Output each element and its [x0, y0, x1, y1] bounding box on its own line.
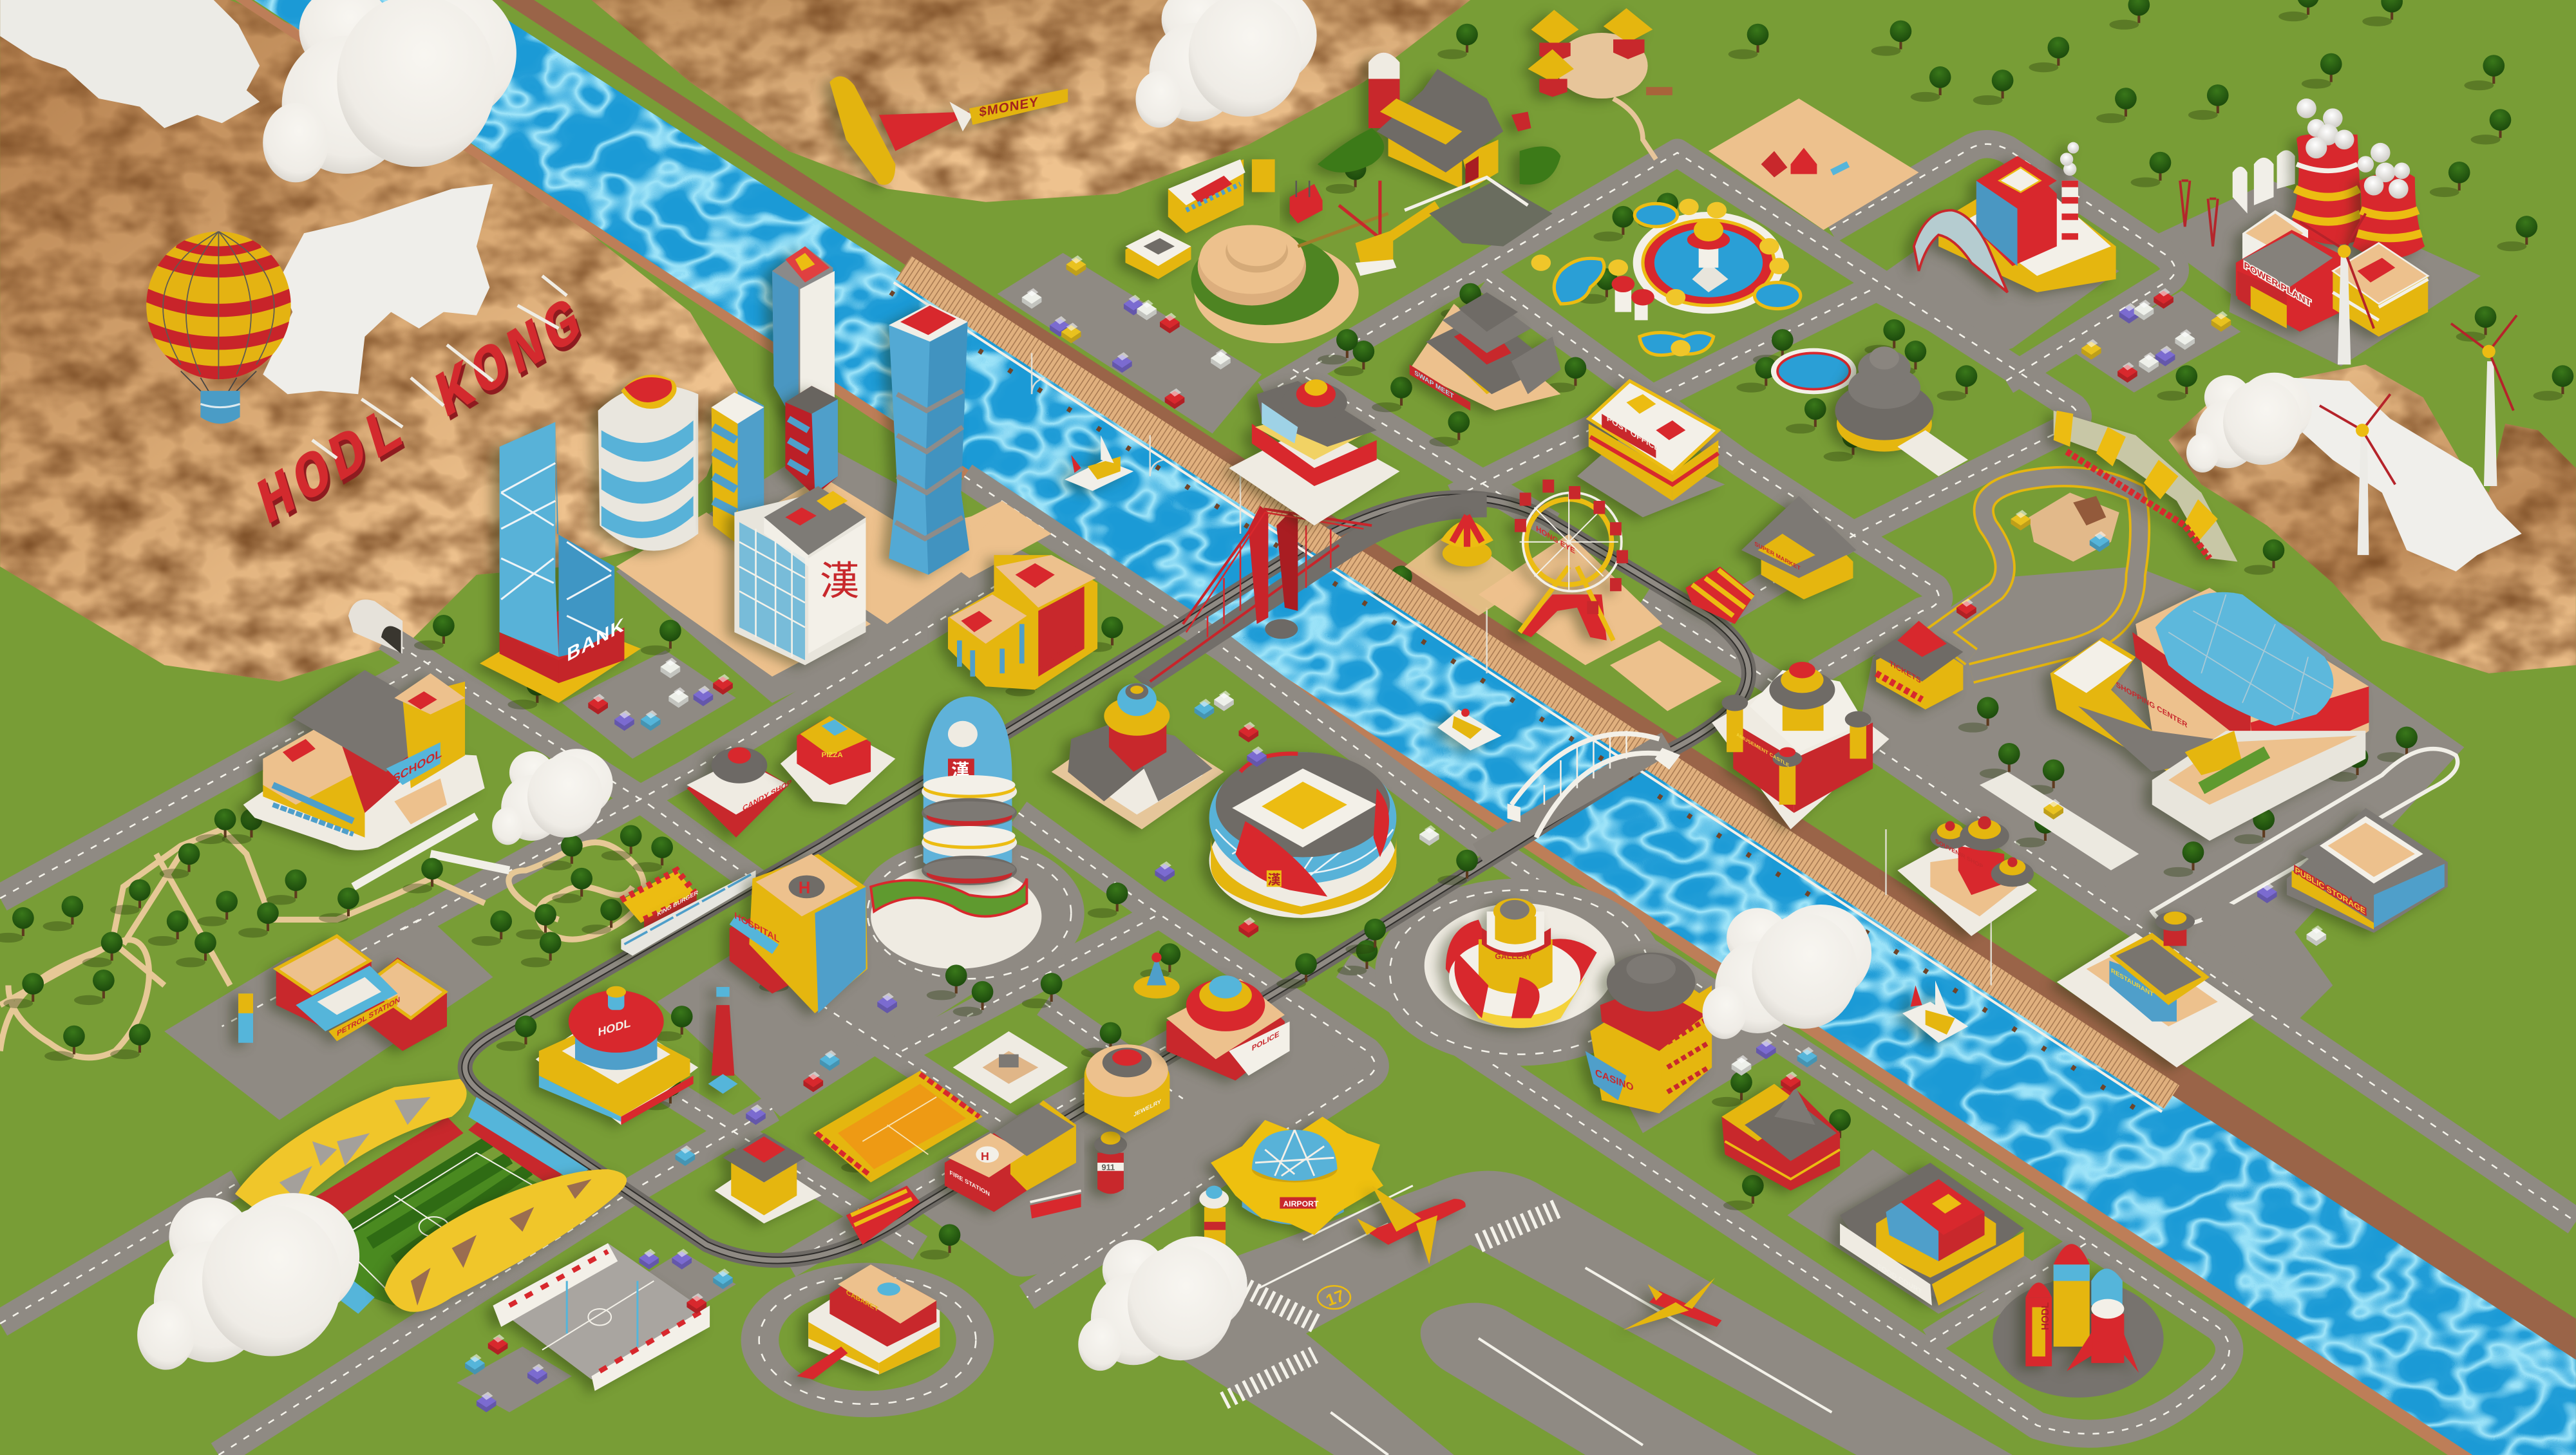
- boat 1: [1065, 435, 1133, 491]
- boat 3: [1902, 981, 1968, 1043]
- cabaret: [797, 1264, 940, 1380]
- police label: POLICE: [1252, 1029, 1280, 1053]
- airport label: AIRPORT: [1283, 1199, 1319, 1208]
- pitch: [328, 1141, 570, 1306]
- race track: [1938, 411, 2237, 673]
- plot: small square: [1610, 641, 1721, 711]
- souvenir label: SOUVENIR SHOP: [1935, 838, 1984, 871]
- wind turbines: [2300, 214, 2517, 555]
- round mound: [1191, 225, 1359, 343]
- mall: [1840, 1163, 2024, 1306]
- petrol station label: PETROL STATION: [337, 995, 400, 1038]
- candy shop: [687, 747, 791, 838]
- mountain: top centre: [591, 0, 1470, 202]
- boardwalk railing: [894, 283, 2162, 1112]
- cloud 5: [1703, 905, 1871, 1039]
- plant hall: [2236, 211, 2428, 337]
- tall blue tower: [889, 304, 969, 575]
- pizza shop: [781, 716, 895, 805]
- arch bridge: [1479, 731, 1679, 854]
- tickets booth: [1873, 621, 1963, 709]
- mountain: right: [2168, 364, 2576, 673]
- round stadium: 漢: [1267, 869, 1281, 888]
- waterside restaurant: [2057, 912, 2254, 1067]
- barn: [1318, 53, 1560, 189]
- super market label: SUPER MARKET: [1754, 540, 1801, 572]
- school label: SCHOOL: [393, 747, 442, 786]
- swap meet label: SWAP MEET: [1414, 369, 1454, 400]
- hodl roof label: HODL: [598, 1016, 630, 1038]
- small house: [715, 1133, 822, 1223]
- shopping center label: SHOPPING CENTER: [2116, 680, 2187, 729]
- runway number: [1318, 1286, 1350, 1310]
- fire truck: [1030, 1190, 1081, 1219]
- yellow kiosk: [1125, 230, 1191, 279]
- hospital label: HOSPITAL: [734, 910, 779, 945]
- boardwalk piles: [891, 292, 2155, 1122]
- football stadium: [235, 1079, 627, 1314]
- runway markings: [1224, 1186, 1832, 1455]
- rock island: [2029, 493, 2119, 561]
- casino: [1586, 952, 1712, 1113]
- tennis court: [813, 1071, 983, 1183]
- red lattice tower: [708, 987, 737, 1094]
- railway: [465, 498, 1748, 1261]
- snow cap: top: [0, 0, 260, 128]
- cinema label: CINEMA: [1038, 640, 1077, 672]
- school: [243, 670, 485, 850]
- airplane: parked: [1357, 1186, 1466, 1264]
- petrol station: [238, 936, 447, 1051]
- rocket label: HODL: [2040, 1302, 2051, 1330]
- red cable car: [1290, 181, 1323, 223]
- bank label: BANK: [567, 613, 625, 666]
- steam: [2297, 99, 2410, 199]
- train: [621, 870, 756, 956]
- white loop path: [2152, 749, 2458, 925]
- cooling tower: left: [2290, 134, 2362, 245]
- fire station: [945, 1100, 1076, 1212]
- red slim tower: [785, 386, 838, 496]
- playground: [1709, 99, 1919, 230]
- cloud 4: [492, 749, 613, 845]
- snow cap: right: [2292, 378, 2522, 572]
- grey high-rise: [772, 247, 835, 430]
- candy shop label: CANDY SHOP: [743, 778, 791, 813]
- runway number: 17: [1323, 1287, 1347, 1310]
- sign: HODL KONG: HODL KONG: [251, 282, 592, 544]
- hospital: [730, 854, 867, 1013]
- pylons: [2180, 181, 2218, 247]
- striped truck: [1685, 567, 1754, 624]
- fire station label: FIRE STATION: [950, 1169, 990, 1198]
- snow cap: middle: [263, 184, 493, 394]
- parking lot near storage: [2201, 895, 2333, 993]
- plot: ferris wheel base: [1479, 534, 1663, 665]
- hong eye label: HONG EYE: [1536, 524, 1575, 556]
- ring road: spiral tower: [855, 838, 1084, 989]
- sign supports: [312, 276, 567, 458]
- fire station: H: [981, 1150, 989, 1163]
- factory: [1914, 142, 2116, 292]
- 911 tower: 911: [1101, 1162, 1115, 1172]
- park paths: bottom left: [0, 829, 644, 1058]
- casino label: CASINO: [1595, 1067, 1633, 1093]
- round stadium: [1209, 752, 1396, 918]
- restaurant label: RESTAURANT: [2111, 968, 2154, 999]
- road-side restaurant: [1229, 379, 1399, 525]
- airport terminal: [1211, 1117, 1383, 1235]
- fountain: [1133, 952, 1180, 999]
- 911 tower: [1094, 1131, 1127, 1194]
- power plant label: POWER PLANT: [2244, 260, 2311, 309]
- food court label: FOOD COURT: [1878, 1263, 1922, 1296]
- market tents: [1528, 8, 1653, 99]
- shopping center: [2050, 588, 2369, 841]
- tunnel: [348, 599, 402, 653]
- plots: tan bases for towers: [616, 476, 1052, 677]
- spiral tower: 漢: [951, 756, 969, 783]
- souvenir shop: [1897, 816, 2037, 936]
- farmers shed: [621, 870, 698, 933]
- ring road: cabaret: [741, 1263, 994, 1417]
- flower field: [1405, 177, 1553, 247]
- water park: [1531, 199, 1801, 357]
- jewelry label: JEWELRY: [1133, 1098, 1162, 1118]
- castle label: AMUSEMENT CASTLE: [1736, 731, 1790, 769]
- cloud 7: [1078, 1236, 1247, 1371]
- river bank: upper: [501, 0, 2576, 1360]
- biplane with banner: [829, 76, 1068, 185]
- street lamps: [1032, 353, 1991, 985]
- farm sign: [1646, 87, 1672, 95]
- striped shed: [846, 1186, 920, 1244]
- fountain square: [953, 1031, 1068, 1103]
- yellow roof: north: [235, 1079, 467, 1216]
- post office label: POST OFFICE: [1607, 413, 1660, 454]
- boardwalk: [891, 268, 2172, 1122]
- stands: [312, 1117, 567, 1223]
- post office: [1577, 381, 1725, 517]
- boat 2: [1437, 709, 1502, 751]
- cars: [465, 256, 2326, 1413]
- hospital: H: [799, 879, 810, 897]
- bank tower: [480, 422, 641, 703]
- airplane: runway: [1623, 1278, 1721, 1330]
- chinese character sign: 漢: [820, 549, 859, 606]
- farmers shed label: KING BURGER: [657, 889, 698, 918]
- factory chimney: [2060, 142, 2079, 250]
- jewelry shop: [1084, 1044, 1170, 1133]
- grandstand: [2054, 411, 2237, 561]
- suspension bridge: [1133, 493, 1487, 690]
- cloud 3: [2186, 373, 2312, 473]
- parking strip: [1980, 772, 2139, 870]
- airport runways: [1175, 1171, 2012, 1455]
- round pagoda and pool: [1771, 346, 1968, 476]
- cloud 6: [137, 1193, 359, 1370]
- cinema: [948, 555, 1097, 690]
- parasols: [1531, 199, 1789, 357]
- pizza label: PIZZA: [822, 751, 843, 759]
- balloon: [140, 232, 298, 424]
- public storage label: PUBLIC STORAGE: [2295, 865, 2365, 916]
- gallery: [1446, 898, 1597, 1028]
- crane: [1298, 181, 1437, 276]
- control tower: [1199, 1186, 1229, 1248]
- plot: carousel base: [1405, 529, 1528, 616]
- carousel: [1441, 516, 1493, 567]
- museum: [1052, 683, 1224, 829]
- basketball arena: [493, 1243, 710, 1391]
- banner label: $MONEY: [979, 95, 1039, 120]
- tickets label: TICKETS: [1889, 659, 1921, 685]
- white and blue office block: [734, 486, 866, 665]
- red villa: [1721, 1084, 1840, 1190]
- rocket: [1993, 1244, 2164, 1398]
- cabaret label: CABARET: [846, 1289, 878, 1313]
- ring road: gallery: [1375, 879, 1664, 1065]
- school crossing paths: [354, 816, 509, 887]
- ferris wheel: [1515, 480, 1628, 641]
- super market: [1741, 496, 1857, 599]
- amusement castle: [1712, 662, 1889, 829]
- gallery label: GALLERY: [1495, 952, 1532, 961]
- cloud 2: [1135, 0, 1317, 127]
- cloud 1: [263, 0, 516, 182]
- pagoda: swap meet: [1410, 292, 1560, 411]
- police station: [1166, 975, 1290, 1080]
- mountain: top left: [0, 0, 739, 682]
- public storage: [2287, 808, 2448, 933]
- wavy white tower: [598, 375, 698, 550]
- power plant: [2233, 99, 2428, 337]
- spiral tower: [922, 697, 1017, 885]
- plots: grey lots: [164, 181, 2481, 1413]
- yellow roof: south: [384, 1169, 627, 1312]
- pools: [1554, 203, 1801, 355]
- yellow slim tower: [712, 391, 764, 545]
- spiral tower garden: [871, 879, 1027, 916]
- dirt path to tents: [1613, 99, 1656, 159]
- cooling tower: right: [2353, 171, 2425, 259]
- yellow block: [1168, 159, 1275, 233]
- hodl round building: [536, 986, 698, 1125]
